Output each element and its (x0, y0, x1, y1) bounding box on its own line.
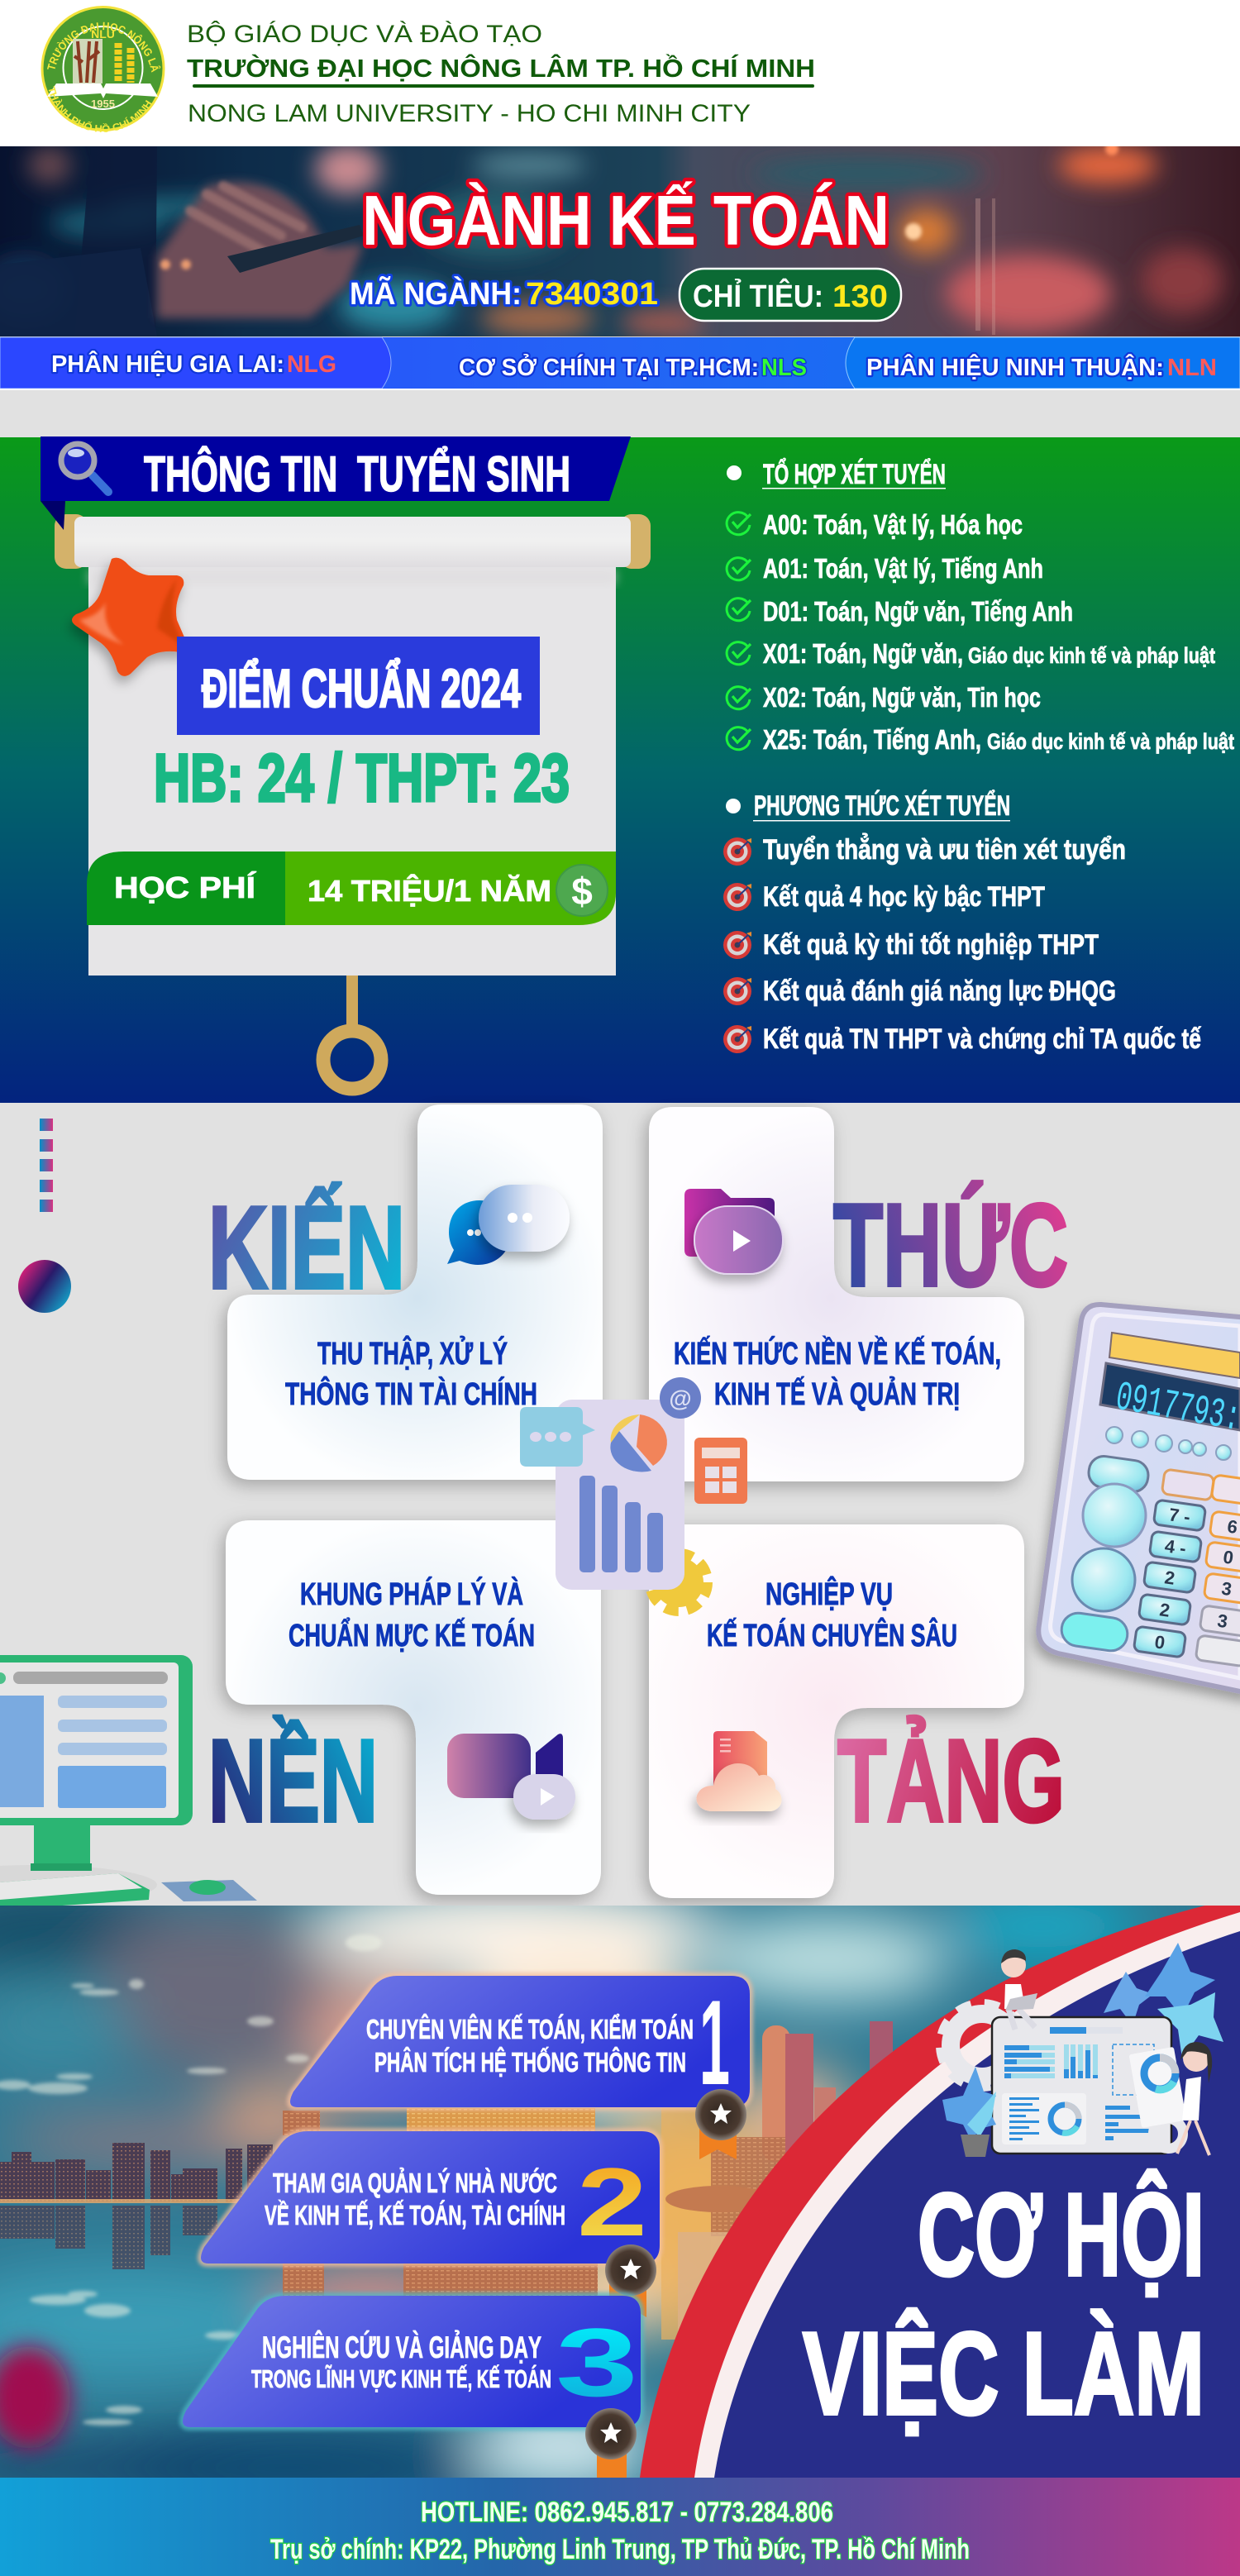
illustration: glossy calculator: 2 (1158, 1599, 1171, 1621)
method: direct admission: Tuyển thẳng và ưu tiên xét tuyển (763, 833, 1126, 866)
tablet (992, 2017, 1171, 2154)
heading: combinations: TỔ HỢP XÉT TUYỂN (763, 459, 946, 490)
logo: Nong Lam University: NLU (91, 27, 115, 41)
gears (941, 2004, 1023, 2087)
icon: at sign (660, 1377, 701, 1419)
combo X01 (727, 638, 1215, 669)
icon: small calculator (694, 1438, 747, 1504)
campus: HCMC: CƠ SỞ CHÍNH TẠI TP.HCM: (459, 353, 759, 381)
combo A01: A01: Toán, Vật lý, Tiếng Anh (763, 553, 1043, 584)
white arc (694, 1912, 1240, 2478)
title: NGÀNH KẾ TOÁN (362, 181, 889, 260)
illustration: desktop computer (0, 1655, 257, 1910)
logo: Nong Lam University: THÀNH PHỐ HỒ CHÍ MINH (48, 86, 152, 132)
potted plant (942, 2067, 996, 2157)
card: financial information: THU THẬP, XỬ LÝ (317, 1335, 508, 1371)
list: subject combinations (727, 459, 1234, 755)
quota pill (680, 269, 901, 321)
career card 1: 1 (699, 1975, 730, 2110)
icon: video camera (447, 1734, 575, 1820)
quota pill: CHỈ TIÊU: (693, 278, 823, 314)
icon: pie chart (610, 1414, 667, 1472)
logo: Nong Lam University: 1955 (91, 98, 115, 110)
quota pill: 130 (832, 279, 888, 314)
banner photo: hand and tablet with city lights (0, 142, 1223, 336)
tuition bar: 14 TRIỆU/1 NĂM (308, 873, 551, 908)
illustration: glossy calculator: 0 (1153, 1631, 1166, 1653)
career card 2 (201, 2131, 660, 2317)
tuition bar: HỌC PHÍ (114, 871, 256, 904)
career card 3 (183, 2296, 641, 2478)
illustration: glossy calculator: 0 (1222, 1547, 1235, 1568)
campus: Gia Lai: PHÂN HIỆU GIA LAI: (51, 350, 284, 378)
combo X25 (727, 724, 1234, 755)
list: admission methods (723, 790, 1201, 1055)
ribbon heading: THÔNG TIN TUYỂN SINH (144, 446, 570, 502)
illustration: glossy calculator: 6 (1226, 1516, 1239, 1538)
card: legal framework: KHUNG PHÁP LÝ VÀ (300, 1576, 523, 1612)
red arc (640, 1897, 1240, 2478)
campus: Gia Lai: NLG (287, 351, 336, 378)
card: legal framework (226, 1520, 601, 1895)
heading: methods (726, 790, 1010, 822)
document with donut (1129, 2047, 1186, 2128)
illustration: glossy calculator: 3 (1220, 1578, 1233, 1600)
illustration: dashboard and characters (941, 1943, 1223, 2157)
decoration: ball (18, 1260, 71, 1313)
address: Trụ sở chính: KP22, Phường Linh Trung, TP Thủ Đức, TP. Hồ Chí Minh (270, 2534, 970, 2565)
roller screen (55, 514, 651, 1089)
tuition bar (87, 852, 616, 925)
career card 3: NGHIÊN CỨU VÀ GIẢNG DẠY (262, 2330, 541, 2364)
english name: NONG LAM UNIVERSITY - HO CHI MINH CITY (188, 100, 751, 127)
card: specialised operations: NGHIỆP VỤ (765, 1576, 893, 1612)
major code: MÃ NGÀNH: (350, 275, 522, 312)
headline word: KIẾN: KIẾN (208, 1181, 405, 1314)
illustration: central report (520, 1377, 747, 1610)
method: four semesters: Kết quả 4 học kỳ bậc THPT (763, 881, 1045, 913)
hotline: HOTLINE: 0862.945.817 - 0773.284.806 (421, 2497, 833, 2528)
logo: Nong Lam University (41, 6, 165, 132)
skyline (0, 2021, 893, 2397)
icon: folder with play (684, 1189, 783, 1274)
heading: combinations (727, 459, 946, 490)
medal 1 (695, 2089, 746, 2159)
icon: chat bubbles (447, 1185, 570, 1265)
career card 3: TRONG LĨNH VỰC KINH TẾ, KẾ TOÁN (251, 2364, 551, 2393)
benchmark heading (177, 637, 540, 735)
panel: campus strip (0, 337, 1240, 389)
combo A00 (727, 509, 1023, 540)
icon: dollar coin: $ (571, 870, 593, 913)
card: specialised operations: KẾ TOÁN CHUYÊN SÂU (707, 1617, 957, 1653)
illustration: glossy calculator: 7 - (1167, 1504, 1191, 1528)
combo A00: A00: Toán, Vật lý, Hóa học (763, 509, 1023, 540)
illustration: glossy calculator: 4 - (1163, 1535, 1187, 1559)
panel: footer (0, 2478, 1240, 2576)
method: graduation exam: Kết quả kỳ thi tốt nghiệp THPT (763, 929, 1099, 961)
campus: HCMC: NLS (761, 355, 807, 381)
major code (350, 275, 658, 312)
heading: career opportunities (803, 2169, 1204, 2440)
major code: 7340301 (526, 277, 658, 312)
headline word: THỨC: THỨC (833, 1180, 1068, 1311)
benchmark scores: HB: 24 / THPT: 23 (154, 741, 570, 816)
panel: knowledge foundation (0, 1103, 1240, 1910)
panel: header (0, 0, 1240, 146)
medal 3 (585, 2408, 637, 2478)
panel: title banner (0, 142, 1240, 336)
university name: TRƯỜNG ĐẠI HỌC NÔNG LÂM TP. HỒ CHÍ MINH (187, 53, 815, 83)
card: foundation knowledge (649, 1107, 1024, 1481)
panel: career opportunities (0, 1885, 1240, 2513)
heading: methods: PHƯƠNG THỨC XÉT TUYỂN (754, 790, 1010, 822)
headline word: NỀN: NỀN (208, 1715, 378, 1847)
decoration: squares (40, 1119, 53, 1212)
combo X25: X25: Toán, Tiếng Anh, (763, 724, 981, 755)
card: financial information (227, 1104, 603, 1480)
number 3: 3 (556, 2308, 638, 2416)
background: sunset sky and city (0, 1885, 1240, 2513)
career card 1: PHÂN TÍCH HỆ THỐNG THÔNG TIN (374, 2046, 686, 2077)
combo D01: D01: Toán, Ngữ văn, Tiếng Anh (763, 596, 1073, 627)
benchmark heading: ĐIỂM CHUẨN 2024 (202, 658, 521, 718)
career card 2: VỀ KINH TẾ, KẾ TOÁN, TÀI CHÍNH (265, 2200, 565, 2230)
career card 2: THAM GIA QUẢN LÝ NHÀ NƯỚC (273, 2168, 557, 2198)
campus: Ninh Thuan: NLN (1167, 355, 1217, 381)
icon: speech bubble (520, 1407, 595, 1467)
illustration: glossy calculator (1038, 1305, 1240, 1693)
combo A01 (727, 553, 1043, 584)
character: woman (1177, 2042, 1212, 2155)
clouds (0, 1934, 382, 2426)
icon: orange star (72, 558, 188, 676)
navy panel (714, 1931, 1240, 2478)
illustration: glossy calculator: 2 (1163, 1567, 1176, 1589)
career card 1 (290, 1975, 750, 2159)
method: competency test: Kết quả đánh giá năng lực ĐHQG (763, 976, 1116, 1007)
combo X02 (727, 682, 1041, 713)
card: foundation knowledge: KINH TẾ VÀ QUẢN TRỊ (714, 1376, 960, 1412)
card: financial information: THÔNG TIN TÀI CHÍNH (285, 1375, 537, 1412)
card: legal framework: CHUẨN MỰC KẾ TOÁN (289, 1616, 535, 1653)
panel: admission information (0, 436, 1240, 1103)
card: specialised operations (649, 1524, 1024, 1898)
ministry line: BỘ GIÁO DỤC VÀ ĐÀO TẠO (187, 20, 542, 48)
character: man with laptop (1001, 1949, 1037, 2030)
combo X01: X01: Toán, Ngữ văn, (763, 638, 963, 669)
career card 1: CHUYÊN VIÊN KẾ TOÁN, KIỂM TOÁN (366, 2014, 694, 2044)
icon: magnifier (61, 444, 108, 492)
combo X02: X02: Toán, Ngữ văn, Tin học (763, 682, 1041, 713)
ribbon heading (41, 436, 631, 530)
campus: Ninh Thuan: PHÂN HIỆU NINH THUẬN: (866, 353, 1164, 381)
icon: dollar coin (556, 865, 608, 916)
medal 2 (605, 2244, 656, 2317)
icon: at sign: @ (669, 1386, 692, 1411)
illustration: glossy calculator: 3 (1216, 1610, 1229, 1632)
number 2: 2 (577, 2148, 647, 2256)
icon: cloud document (696, 1731, 781, 1811)
icon: gear (651, 1555, 706, 1610)
headline word: TẢNG: TẢNG (837, 1715, 1065, 1847)
card: foundation knowledge: KIẾN THỨC NỀN VỀ KẾ TOÁN, (674, 1335, 1001, 1371)
top leaves (1104, 1943, 1223, 2058)
